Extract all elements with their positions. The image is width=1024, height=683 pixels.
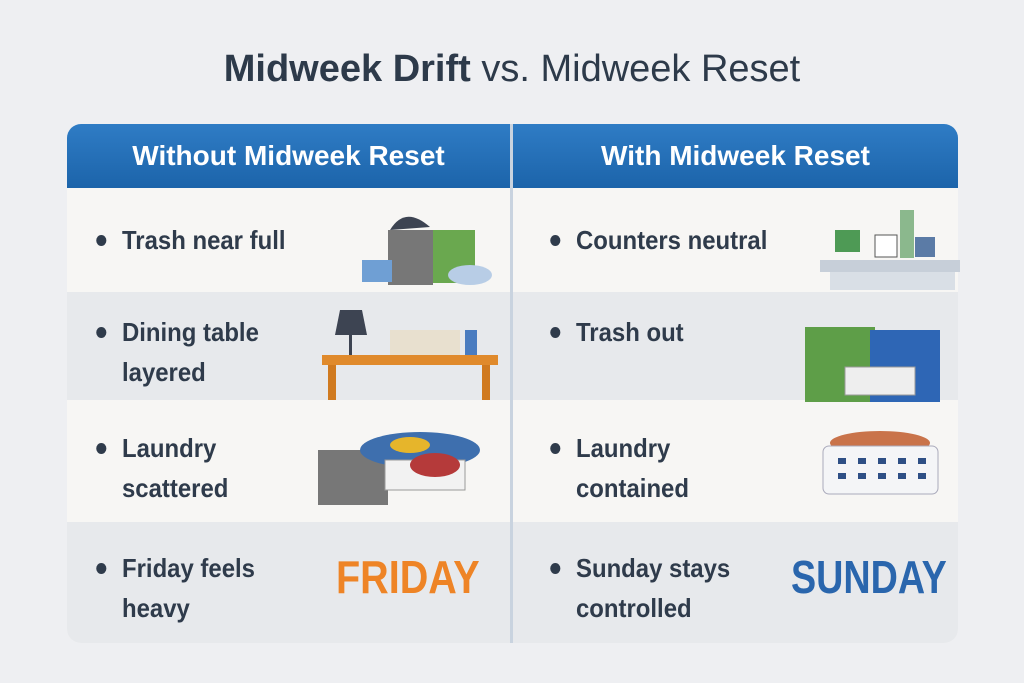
icon: laundry pile: [318, 432, 480, 505]
text: Trash out: [576, 317, 684, 347]
header left: Without Midweek Reset: [132, 140, 445, 171]
icon: basket: [822, 431, 938, 494]
text: Friday feels: [122, 553, 255, 583]
right rows text: Counters neutral: [576, 225, 767, 255]
title: Midweek Drift vs. Midweek Reset: [224, 48, 800, 90]
text: controlled: [576, 593, 692, 623]
text: Sunday stays: [576, 553, 730, 583]
text: Laundry: [576, 433, 670, 463]
header right: With Midweek Reset: [601, 140, 870, 171]
text: layered: [122, 357, 206, 387]
table: [67, 124, 958, 643]
text: Dining table: [122, 317, 259, 347]
text: Laundry: [122, 433, 216, 463]
text: contained: [576, 473, 689, 503]
left rows text: Trash near full: [122, 225, 286, 255]
header right: [513, 124, 958, 188]
icon: counter: [820, 210, 960, 290]
icon: trash cans: [362, 216, 492, 285]
icon: table: [322, 310, 498, 400]
text: heavy: [122, 593, 190, 623]
icon: bins: [805, 327, 940, 402]
sunday: SUNDAY: [791, 551, 947, 603]
friday: FRIDAY: [336, 551, 480, 603]
header left: [67, 124, 510, 188]
text: scattered: [122, 473, 228, 503]
